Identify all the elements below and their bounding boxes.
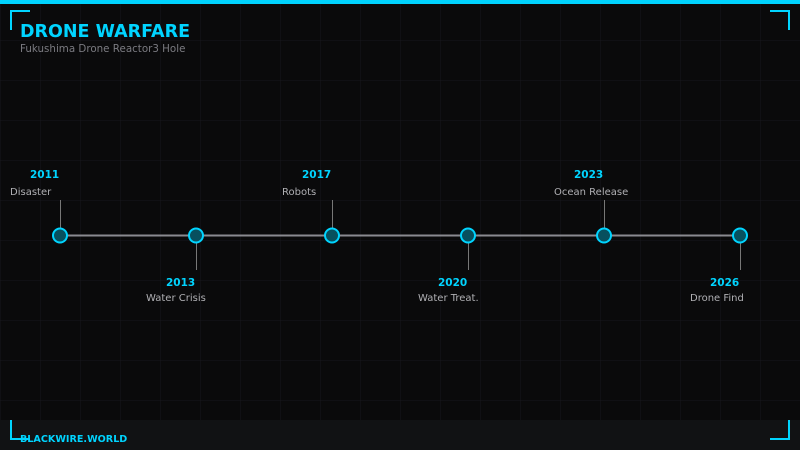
event 2023: Ocean Release bbox=[554, 187, 628, 198]
event 2013 bbox=[146, 228, 206, 304]
event 2017: Robots bbox=[282, 187, 316, 198]
event 2011: 2011 bbox=[30, 169, 59, 181]
event 2020: 2020 bbox=[438, 277, 467, 289]
event 2013: 2013 bbox=[166, 277, 195, 289]
event 2011: Disaster bbox=[10, 187, 52, 198]
event 2026 bbox=[690, 228, 747, 304]
event 2017: 2017 bbox=[302, 169, 331, 181]
event 2013: Water Crisis bbox=[146, 293, 206, 304]
event 2023: 2023 bbox=[574, 169, 603, 181]
title: DRONE WARFARE bbox=[20, 22, 190, 42]
footer brand: BLACKWIRE.WORLD bbox=[20, 434, 127, 445]
timeline bbox=[10, 169, 747, 304]
event 2026: Drone Find bbox=[690, 293, 744, 304]
event 2020 bbox=[418, 228, 479, 304]
subtitle: Fukushima Drone Reactor3 Hole bbox=[20, 43, 185, 55]
event 2017 bbox=[282, 169, 339, 242]
event 2026: 2026 bbox=[710, 277, 739, 289]
event 2023 bbox=[554, 169, 628, 242]
event 2011 bbox=[10, 169, 67, 242]
event 2020: Water Treat. bbox=[418, 293, 479, 304]
